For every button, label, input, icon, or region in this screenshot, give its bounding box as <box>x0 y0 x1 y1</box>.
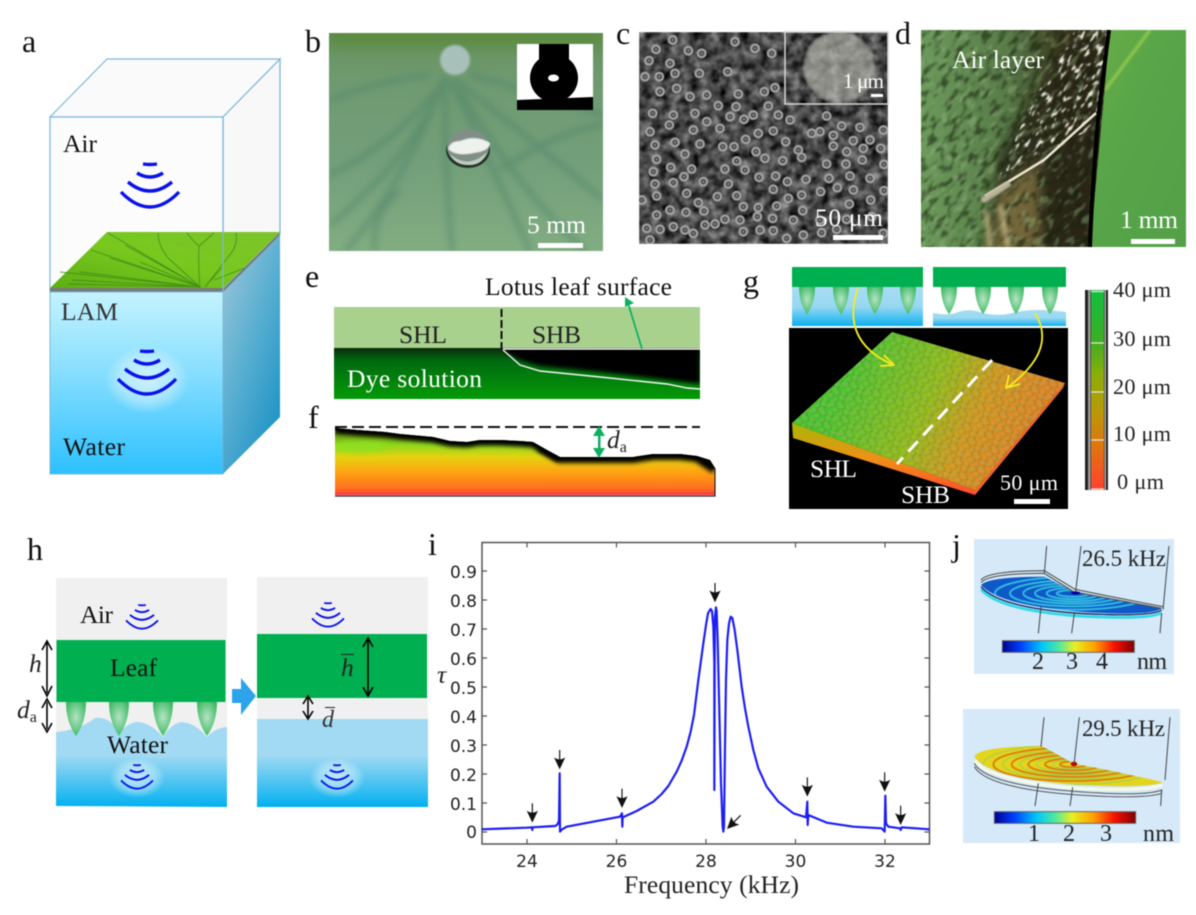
disk shape 26.5 <box>981 546 1169 652</box>
text Dye solution: Dye solution <box>347 364 482 393</box>
y-axis tick labels: 0 <box>466 823 477 843</box>
yellow arrow right <box>1006 313 1042 388</box>
disk shape 29.5 <box>974 717 1170 823</box>
scale values: 2 <box>1063 821 1075 847</box>
y-axis tick labels <box>450 563 477 843</box>
base line <box>335 468 715 496</box>
y-axis tick labels: 0.3 <box>450 737 477 757</box>
text SHB: SHB <box>901 480 950 509</box>
h double arrow <box>42 641 52 696</box>
text: LAM: LAM <box>61 297 118 326</box>
plate sides <box>792 383 1065 495</box>
inset: contact angle <box>517 44 593 110</box>
mode 26.5 kHz card <box>974 539 1174 675</box>
colorbar <box>1085 290 1108 490</box>
inset text 1 um: 1 μm <box>843 69 884 93</box>
dye band <box>334 348 700 399</box>
x-axis tick labels: 26 <box>606 852 627 872</box>
scale values: 3 <box>1066 649 1078 675</box>
x-axis tick labels: 32 <box>874 852 896 872</box>
icon waves air right <box>312 603 344 627</box>
icon: sound waves in air <box>121 164 179 207</box>
scale values: nm <box>1143 821 1174 847</box>
label h bar: h <box>341 653 354 682</box>
text SHL: SHL <box>399 320 447 349</box>
x-axis tick labels: 30 <box>785 852 806 872</box>
text Leaf: Leaf <box>110 653 158 682</box>
scale bar <box>1131 239 1175 244</box>
y-axis tick labels: 0.1 <box>450 795 477 815</box>
y-axis tick labels: 0.2 <box>450 766 477 786</box>
scale bar <box>538 243 583 248</box>
label h: h <box>27 531 43 567</box>
text SHL: SHL <box>810 454 857 483</box>
y-axis tick labels: 0.8 <box>450 592 477 612</box>
text Air: Air <box>80 600 114 629</box>
scale values: nm <box>1137 649 1167 675</box>
dashed divider <box>897 360 992 464</box>
label a: a <box>22 23 36 59</box>
label c: c <box>616 15 630 51</box>
left air-layer area <box>920 29 1108 248</box>
scale text: 50 μm <box>1000 470 1058 495</box>
scale text 50 um: 50 μm <box>815 203 883 232</box>
dashed reference line <box>335 426 700 428</box>
label d_a: d <box>607 425 620 454</box>
left schematic <box>56 578 227 807</box>
panel a: air-water box with leaf <box>22 23 280 474</box>
glow water left <box>109 758 165 798</box>
scale values <box>1032 649 1167 675</box>
label g: g <box>743 263 759 299</box>
panel d: air layer photo <box>747 0 1196 426</box>
scale values: 2 <box>1032 649 1044 675</box>
panel c: SEM image <box>616 15 888 244</box>
green double arrow <box>593 426 605 458</box>
schematic left: wetted <box>792 267 923 326</box>
scale text 5 mm: 5 mm <box>527 210 586 239</box>
inset scale bar <box>871 94 883 97</box>
leaf surface <box>50 232 280 288</box>
panel j: simulated mode shapes <box>951 527 1180 847</box>
plot frame and ticks <box>482 542 930 844</box>
papillae rings <box>642 40 884 240</box>
y-axis tick labels: 0.7 <box>450 621 477 641</box>
inset: single papilla <box>785 32 888 104</box>
leaf edge bar <box>50 232 280 292</box>
y-axis tick labels: 0.6 <box>450 650 477 670</box>
black image background <box>789 328 1068 509</box>
back edge of box <box>223 59 280 292</box>
leaf band <box>334 307 700 348</box>
colorbar labels <box>1113 277 1171 494</box>
x-axis label: Frequency (kHz) <box>624 870 799 899</box>
colorbar labels: 30 μm <box>1113 326 1171 351</box>
da double arrow <box>42 699 52 732</box>
box air faces <box>50 59 280 291</box>
text: Air: Air <box>63 129 98 158</box>
label j: j <box>951 527 961 563</box>
frequency text: 29.5 kHz <box>1082 716 1165 741</box>
icon waves water right <box>321 765 353 789</box>
icon waves water left <box>121 765 153 789</box>
heading: Lotus leaf surface: Lotus leaf surface <box>485 272 672 301</box>
panel i: transmission spectrum chart <box>428 526 930 899</box>
water front face <box>50 292 223 474</box>
panel h: effective-layer schematic <box>17 531 428 807</box>
panel f: height profile <box>308 399 715 496</box>
label f: f <box>308 399 319 435</box>
colorbar labels: 20 μm <box>1113 374 1171 399</box>
right schematic <box>257 577 428 807</box>
y-axis tick labels: 0.9 <box>450 563 477 583</box>
label d_a: a <box>620 439 627 456</box>
label h italic: h <box>29 649 42 678</box>
label e: e <box>305 258 319 294</box>
colorbar labels: 40 μm <box>1113 277 1171 302</box>
mode 29.5 kHz card <box>963 709 1180 847</box>
leaf veins <box>329 26 603 251</box>
profile body <box>332 426 715 496</box>
schematic right: air-trapped <box>933 267 1066 326</box>
spectrum curve <box>482 607 929 832</box>
pointer arrow <box>625 297 642 349</box>
scale values: 1 <box>1028 821 1040 847</box>
resonance arrows <box>527 583 906 833</box>
air boundary line <box>503 349 700 389</box>
y-axis label tau: τ <box>437 660 447 689</box>
blurred droplet <box>440 45 470 75</box>
leaf photo background <box>329 33 603 251</box>
water side face <box>223 235 280 474</box>
glow behind water waves <box>105 346 189 414</box>
y-axis tick labels: 0.5 <box>450 679 477 699</box>
h-bar double arrow <box>363 638 373 696</box>
black boundary line <box>1090 30 1109 247</box>
scale values <box>1028 821 1174 847</box>
scale values: 3 <box>1100 821 1112 847</box>
label d: d <box>895 15 911 51</box>
label b: b <box>305 23 321 59</box>
colorbar labels: 0 μm <box>1117 469 1164 494</box>
glow water right <box>309 758 365 798</box>
d-bar double arrow <box>303 696 313 719</box>
colorbar labels: 10 μm <box>1113 421 1171 446</box>
text: Water: Water <box>63 432 126 461</box>
label i: i <box>428 526 437 562</box>
right leaf area <box>1085 30 1186 247</box>
air pocket dark zone <box>502 349 700 387</box>
text Water: Water <box>107 730 168 759</box>
text SHB: SHB <box>532 320 581 349</box>
scale bar <box>1014 499 1050 504</box>
scale text 1 mm: 1 mm <box>1120 205 1178 234</box>
x-axis tick labels <box>516 852 896 872</box>
dashed divider <box>500 309 502 349</box>
icon: sound waves in water <box>118 351 176 394</box>
panel e: dye solution cross-section <box>305 258 700 399</box>
y-axis tick labels: 0.4 <box>450 708 477 728</box>
icon waves air left <box>126 605 158 629</box>
label d_a: d <box>17 695 30 724</box>
SEM noise background <box>639 32 888 244</box>
text: Air layer: Air layer <box>952 45 1044 74</box>
blue transition arrow <box>232 678 256 715</box>
plate top surface with bumps <box>789 328 1068 493</box>
scale bar <box>833 235 883 240</box>
scale values: 4 <box>1096 649 1108 675</box>
yellow arrow left <box>853 288 894 366</box>
panel b: droplet on leaf photo <box>305 23 603 251</box>
panel g: 3D height map <box>743 263 1171 509</box>
water droplet <box>446 129 490 168</box>
x-axis tick labels: 28 <box>695 852 717 872</box>
label d bar: d <box>322 707 335 733</box>
x-axis tick labels: 24 <box>516 852 538 872</box>
label d_a: a <box>30 709 37 726</box>
frequency text: 26.5 kHz <box>1082 546 1166 571</box>
